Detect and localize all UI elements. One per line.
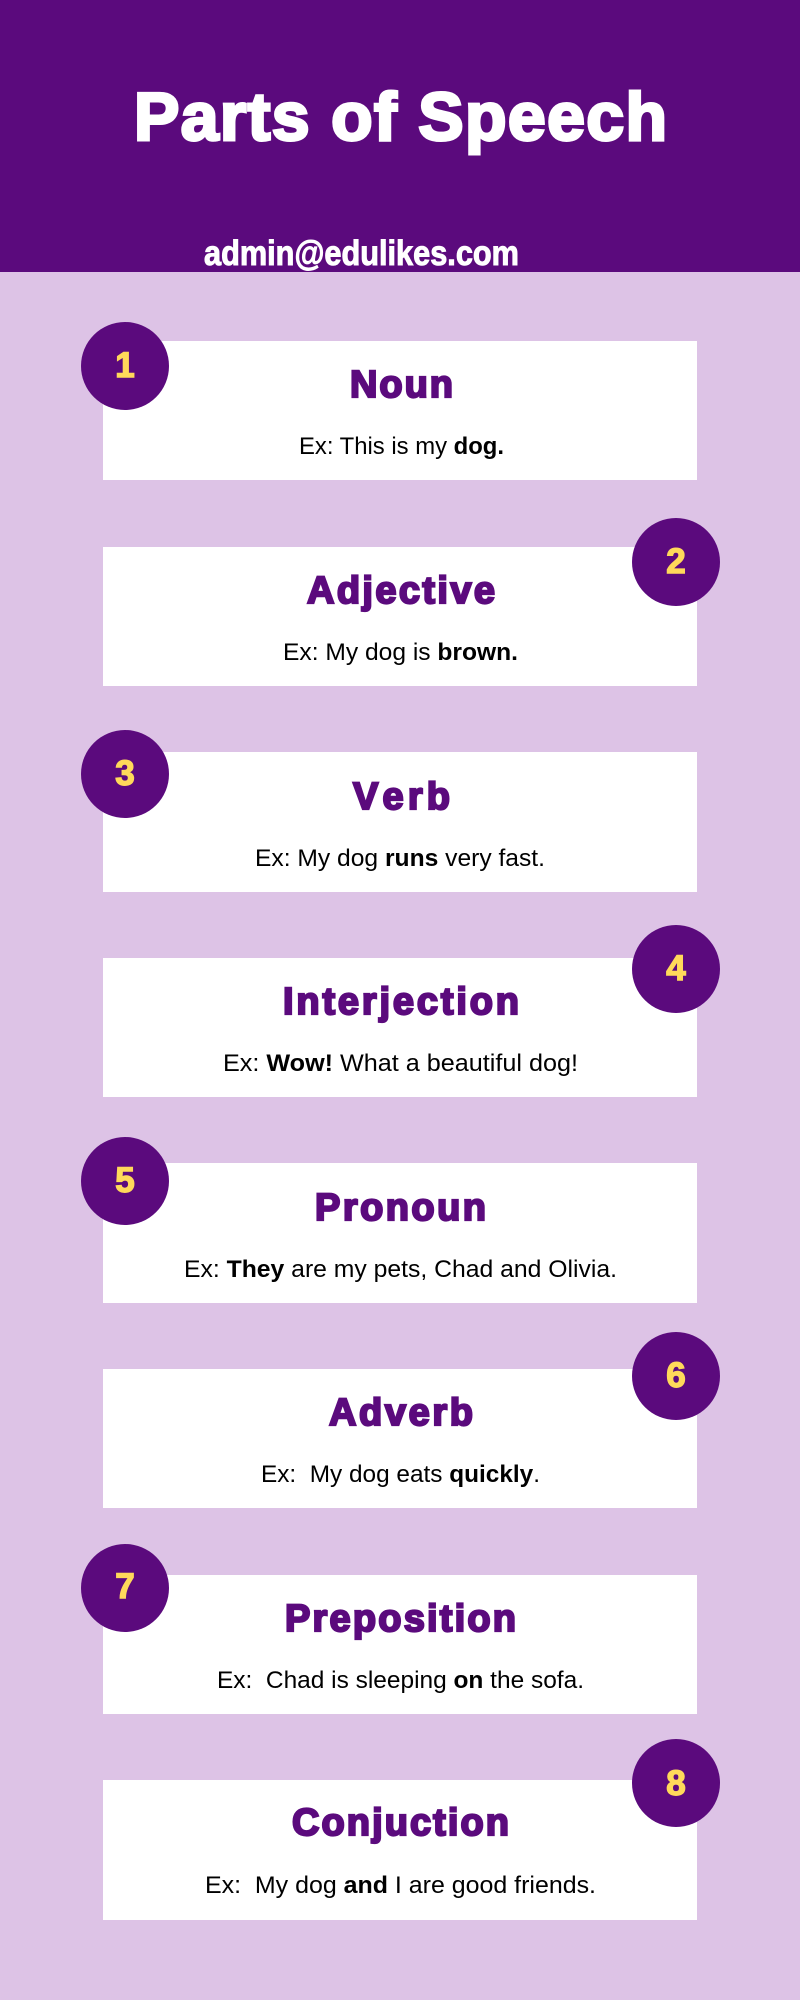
heading: adverb: Adverb — [329, 1392, 473, 1434]
number badge 3: 3 — [115, 754, 135, 793]
number badge 2: 2 — [666, 542, 686, 581]
example: interjection: Ex: Wow! What a beautiful dog! — [223, 1050, 578, 1077]
number badge 4 — [632, 925, 720, 1013]
panel: preposition — [81, 1544, 697, 1714]
example: conjunction: Ex: My dog and I are good friends. — [205, 1872, 596, 1899]
number badge 8: 8 — [666, 1764, 686, 1803]
example: verb: Ex: My dog runs very fast. — [255, 845, 545, 872]
panel: adverb — [103, 1332, 720, 1508]
heading: preposition: Preposition — [285, 1598, 516, 1640]
heading: adjective: Adjective — [307, 570, 495, 612]
heading: interjection: Interjection — [283, 981, 519, 1023]
number badge 4: 4 — [666, 949, 686, 988]
example: noun: Ex: This is my dog. — [299, 433, 504, 460]
number badge 6: 6 — [666, 1356, 686, 1395]
panel: verb — [81, 730, 697, 892]
panel: pronoun — [81, 1137, 697, 1303]
number badge 3 — [81, 730, 169, 818]
title: Parts of Speech — [134, 79, 667, 155]
heading: noun: Noun — [350, 364, 453, 406]
contact email: admin@edulikes.com — [204, 234, 519, 273]
heading: verb: Verb — [353, 776, 450, 818]
number badge 1: 1 — [115, 346, 135, 385]
number badge 5: 5 — [115, 1161, 135, 1200]
panel: adjective — [103, 518, 720, 686]
example: adjective: Ex: My dog is brown. — [283, 639, 518, 666]
example: preposition: Ex: Chad is sleeping on the sofa. — [217, 1667, 584, 1694]
example: adverb: Ex: My dog eats quickly. — [261, 1461, 540, 1488]
panel: interjection — [103, 925, 720, 1097]
number badge 5 — [81, 1137, 169, 1225]
number badge 1 — [81, 322, 169, 410]
panel: noun — [81, 322, 697, 480]
panel: conjunction — [103, 1739, 720, 1920]
example: pronoun: Ex: They are my pets, Chad and Olivia. — [184, 1256, 617, 1283]
heading: conjunction: Conjuction — [292, 1802, 509, 1844]
number badge 2 — [632, 518, 720, 606]
number badge 7 — [81, 1544, 169, 1632]
header band — [0, 0, 800, 273]
number badge 7: 7 — [115, 1567, 135, 1606]
number badge 6 — [632, 1332, 720, 1420]
heading: pronoun: Pronoun — [315, 1187, 486, 1229]
number badge 8 — [632, 1739, 720, 1827]
